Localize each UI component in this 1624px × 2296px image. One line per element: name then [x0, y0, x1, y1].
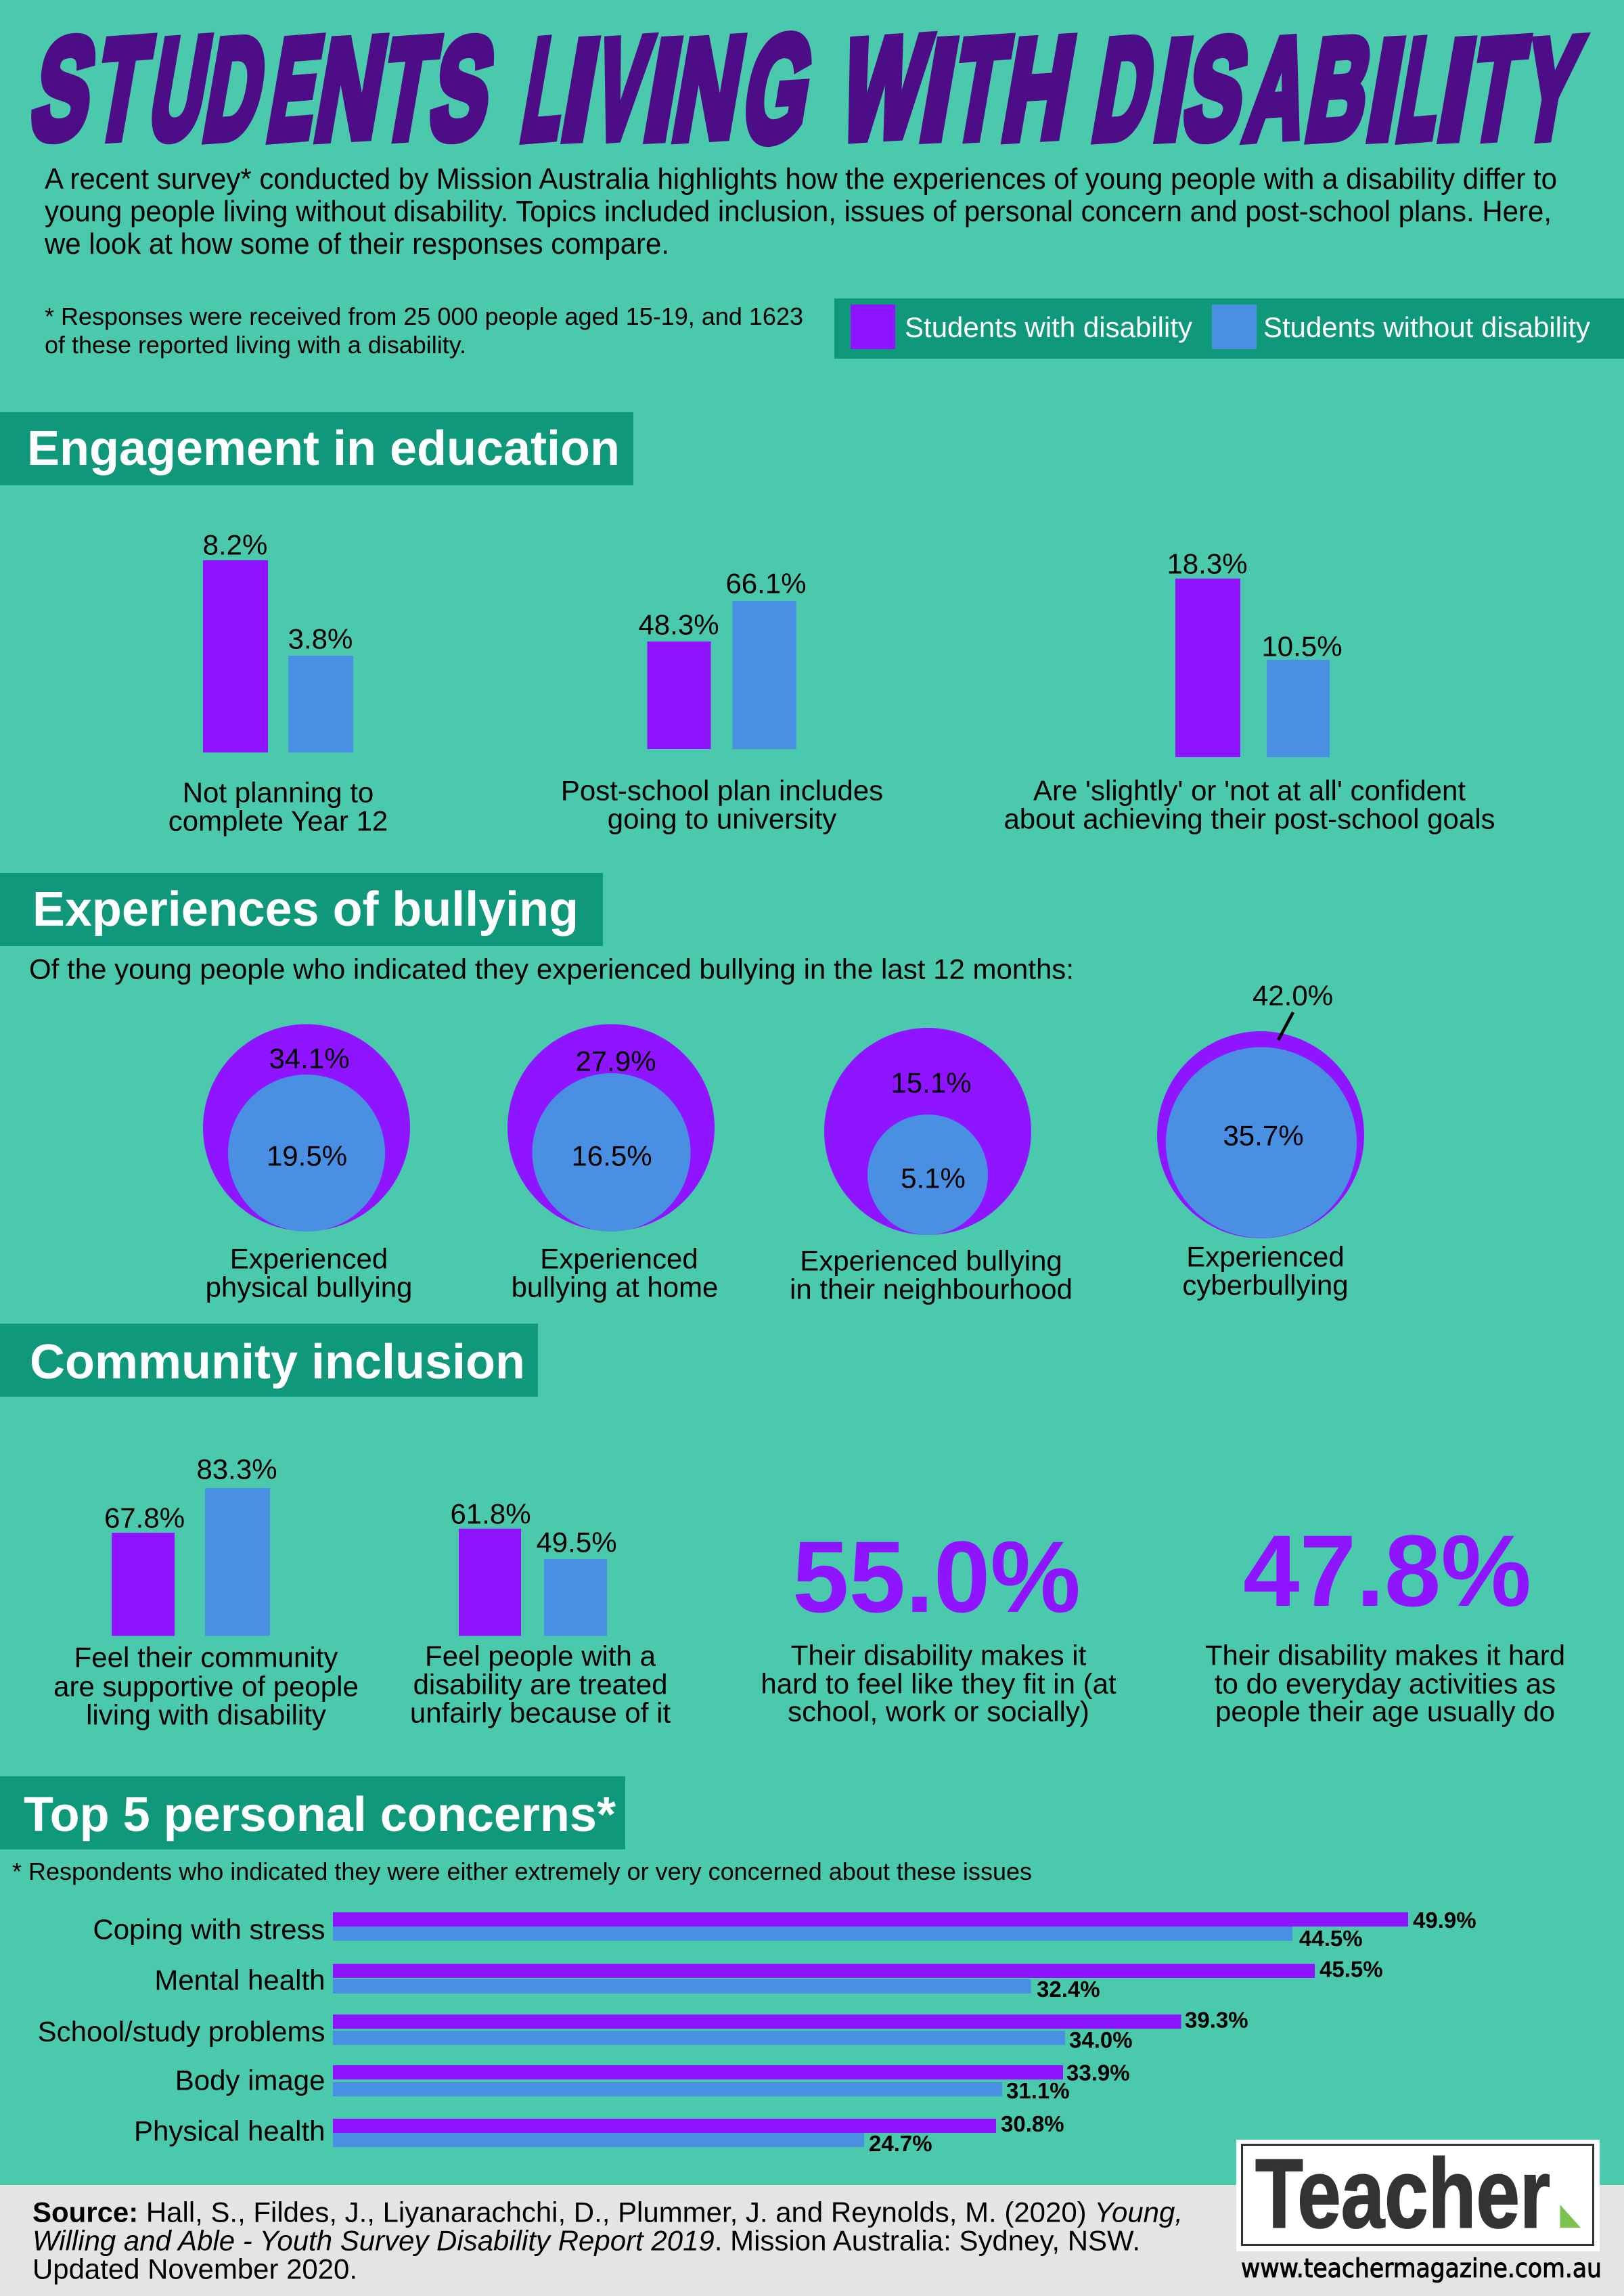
stat: 47.8% — [1205, 1514, 1565, 1727]
title: T — [371, 9, 447, 170]
stat: 47.8%: to do everyday activities as — [1215, 1667, 1556, 1700]
circle chart: bullying at home: Experienced — [540, 1242, 698, 1275]
title: U — [140, 7, 221, 170]
bar chart: confidence in post-school goals: 10.5% — [1261, 631, 1343, 662]
circle chart: bullying at home: 27.9% — [575, 1045, 656, 1077]
bar chart: community supportive — [53, 1454, 359, 1731]
heading: engagement in education: Engagement in education — [27, 422, 620, 476]
circle chart: bullying at home: 16.5% — [571, 1140, 652, 1172]
row: mental health: Mental health — [154, 1964, 325, 1996]
title: T — [943, 9, 1018, 170]
bar chart: community supportive: Feel their community — [74, 1642, 338, 1673]
legend — [834, 298, 1624, 359]
row: coping with stress: 44.5% — [1299, 1926, 1363, 1951]
row: physical health: 24.7% — [869, 2131, 932, 2156]
intro paragraph: we look at how some of their responses compare. — [44, 228, 669, 261]
survey footnote: of these reported living with a disability. — [45, 331, 466, 359]
circle chart: neighbourhood bullying: 15.1% — [890, 1066, 972, 1099]
bar chart: treated unfairly: disability are treated — [413, 1669, 667, 1700]
intro paragraph: young people living without disability. Topics included inclusion, issues of personal concern and post-school plans. Here, — [45, 196, 1552, 228]
survey footnote: * Responses were received from 25 000 people aged 15-19, and 1623 — [45, 302, 803, 330]
title: L — [513, 7, 579, 170]
circle chart: cyberbullying: cyberbullying — [1182, 1269, 1349, 1301]
stat: 55.0%: hard to feel like they fit in (at — [761, 1667, 1116, 1700]
bar chart: not planning to complete Year 12: Not planning to — [183, 777, 374, 808]
title: L — [1389, 7, 1455, 170]
bar chart: confidence in post-school goals: Are 'slightly' or 'not at all' confident — [1033, 774, 1466, 807]
title — [22, 3, 1591, 174]
row: mental health — [154, 1957, 1383, 2002]
heading: community inclusion — [0, 1324, 538, 1397]
row: body image: Body image — [175, 2064, 325, 2096]
bar chart: community supportive: are supportive of people — [53, 1670, 359, 1703]
bar chart: community supportive: 67.8% — [104, 1502, 185, 1533]
bar chart: confidence in post-school goals: 18.3% — [1167, 548, 1248, 579]
bar chart: community supportive: 83.3% — [196, 1454, 277, 1485]
bar chart: post-school plan includes university — [561, 567, 883, 835]
title: A — [1237, 7, 1320, 170]
row: mental health: 45.5% — [1320, 1957, 1383, 1981]
intro paragraph: A recent survey* conducted by Mission Australia highlights how the experiences of young people with a disability differ to — [45, 163, 1557, 196]
circle chart: neighbourhood bullying: in their neighbourhood — [790, 1274, 1073, 1305]
title: S — [1175, 8, 1259, 171]
row: school/study problems: School/study problems — [38, 2015, 325, 2048]
row: body image: 33.9% — [1066, 2060, 1130, 2086]
legend: Students without disability — [1263, 311, 1590, 343]
title: G — [734, 3, 824, 174]
stat: 55.0%: Their disability makes it — [791, 1639, 1087, 1671]
title: T — [1460, 9, 1535, 170]
concerns footnote: * Respondents who indicated they were either extremely or very concerned about these issues — [12, 1858, 1032, 1885]
stat: 55.0%: 55.0% — [792, 1520, 1081, 1634]
row: physical health: 30.8% — [1001, 2111, 1064, 2136]
stat: 55.0%: school, work or socially) — [788, 1696, 1089, 1727]
heading: experiences of bullying — [0, 873, 603, 946]
title: H — [993, 8, 1085, 170]
bar chart: treated unfairly — [410, 1498, 671, 1728]
heading: community inclusion: Community inclusion — [30, 1335, 525, 1389]
row: coping with stress: Coping with stress — [93, 1914, 325, 1945]
title: V — [585, 7, 660, 170]
row: body image — [175, 2060, 1130, 2103]
circle chart: physical bullying: 34.1% — [269, 1042, 350, 1075]
bar chart: post-school plan includes university: 48.3% — [638, 609, 719, 640]
circle chart: cyberbullying — [1157, 980, 1364, 1301]
row: school/study problems: 34.0% — [1069, 2027, 1133, 2052]
circle chart: physical bullying: 19.5% — [267, 1140, 347, 1172]
bar chart: post-school plan includes university: Post-school plan includes — [561, 774, 883, 807]
circle chart: neighbourhood bullying — [790, 1028, 1073, 1305]
title: E — [259, 8, 332, 170]
bar chart: post-school plan includes university: 66.1% — [725, 567, 807, 600]
bullying intro text: Of the young people who indicated they experienced bullying in the last 12 months: — [29, 953, 1074, 985]
row: coping with stress: 49.9% — [1413, 1908, 1476, 1933]
title: D — [195, 7, 277, 171]
title: I — [552, 9, 609, 170]
source citation: Source: Hall, S., Fildes, J., Liyanarachchi, D., Plummer, J. and Reynolds, M. (2020) Young, — [32, 2197, 1183, 2228]
bar chart: not planning to complete Year 12: 3.8% — [288, 623, 353, 655]
circle chart: physical bullying: physical bullying — [206, 1271, 412, 1303]
title: I — [1428, 9, 1485, 170]
logo: Teacher magazine: Teacher — [1255, 2138, 1550, 2248]
circle chart: cyberbullying: Experienced — [1186, 1241, 1345, 1272]
source citation: Willing and Able - Youth Survey Disability Report 2019. Mission Australia: Sydney, NSW. — [32, 2225, 1140, 2256]
heading: top 5 personal concerns: Top 5 personal concerns* — [24, 1788, 616, 1842]
circle chart: physical bullying — [203, 1025, 412, 1303]
survey footnote — [45, 302, 803, 359]
title: Y — [1512, 7, 1591, 170]
circle chart: neighbourhood bullying: Experienced bullying — [800, 1245, 1062, 1276]
stat: 55.0% — [761, 1520, 1116, 1727]
bar chart: not planning to complete Year 12: complete Year 12 — [168, 805, 388, 836]
bar chart: not planning to complete Year 12: 8.2% — [203, 529, 267, 560]
title: I — [635, 9, 692, 170]
stat: 47.8%: people their age usually do — [1215, 1696, 1555, 1727]
row: mental health: 32.4% — [1037, 1977, 1100, 2002]
bar chart: treated unfairly: unfairly because of it — [410, 1697, 671, 1728]
title: N — [306, 7, 397, 170]
intro paragraph — [44, 163, 1557, 261]
row: coping with stress — [93, 1908, 1476, 1951]
title: I — [911, 9, 968, 170]
bar chart: treated unfairly: 49.5% — [536, 1527, 617, 1558]
row: physical health — [134, 2111, 1064, 2156]
title: D — [1084, 7, 1166, 171]
circle chart: bullying at home: bullying at home — [512, 1271, 718, 1303]
heading: experiences of bullying: Experiences of bullying — [32, 882, 579, 937]
circle chart: cyberbullying: 35.7% — [1223, 1119, 1304, 1152]
circle chart: neighbourhood bullying: 5.1% — [901, 1163, 966, 1194]
bar chart: treated unfairly: 61.8% — [450, 1498, 531, 1529]
title: S — [22, 8, 106, 171]
heading: engagement in education — [0, 412, 633, 485]
bar chart: post-school plan includes university: going to university — [608, 803, 836, 835]
stat: 47.8%: 47.8% — [1243, 1514, 1531, 1627]
horizontal bar chart: personal concerns — [38, 1908, 1476, 2156]
stat: 47.8%: Their disability makes it hard — [1205, 1639, 1565, 1671]
bar chart: treated unfairly: Feel people with a — [425, 1640, 656, 1671]
title: I — [1145, 9, 1202, 170]
row: body image: 31.1% — [1006, 2078, 1070, 2103]
bar chart: not planning to complete Year 12 — [168, 529, 388, 836]
title: N — [664, 7, 754, 170]
title: S — [421, 8, 505, 171]
source citation — [32, 2197, 1183, 2284]
row: school/study problems — [38, 2007, 1248, 2052]
bar chart: confidence in post-school goals: about achieving their post-school goals — [1003, 803, 1495, 835]
title: T — [85, 8, 160, 170]
footer band — [0, 2185, 1624, 2296]
title: I — [1357, 9, 1414, 170]
circle chart: cyberbullying: 42.0% — [1253, 980, 1333, 1011]
legend: Students with disability — [905, 311, 1192, 343]
bar chart: community supportive: living with disability — [86, 1698, 326, 1731]
bar chart: confidence in post-school goals — [1003, 548, 1495, 835]
row: physical health: Physical health — [134, 2115, 325, 2146]
title: B — [1297, 7, 1382, 170]
circle chart: physical bullying: Experienced — [230, 1242, 388, 1275]
source citation: Updated November 2020. — [32, 2253, 357, 2284]
row: school/study problems: 39.3% — [1185, 2007, 1248, 2033]
circle chart: bullying at home — [508, 1025, 718, 1303]
title: W — [831, 7, 938, 171]
